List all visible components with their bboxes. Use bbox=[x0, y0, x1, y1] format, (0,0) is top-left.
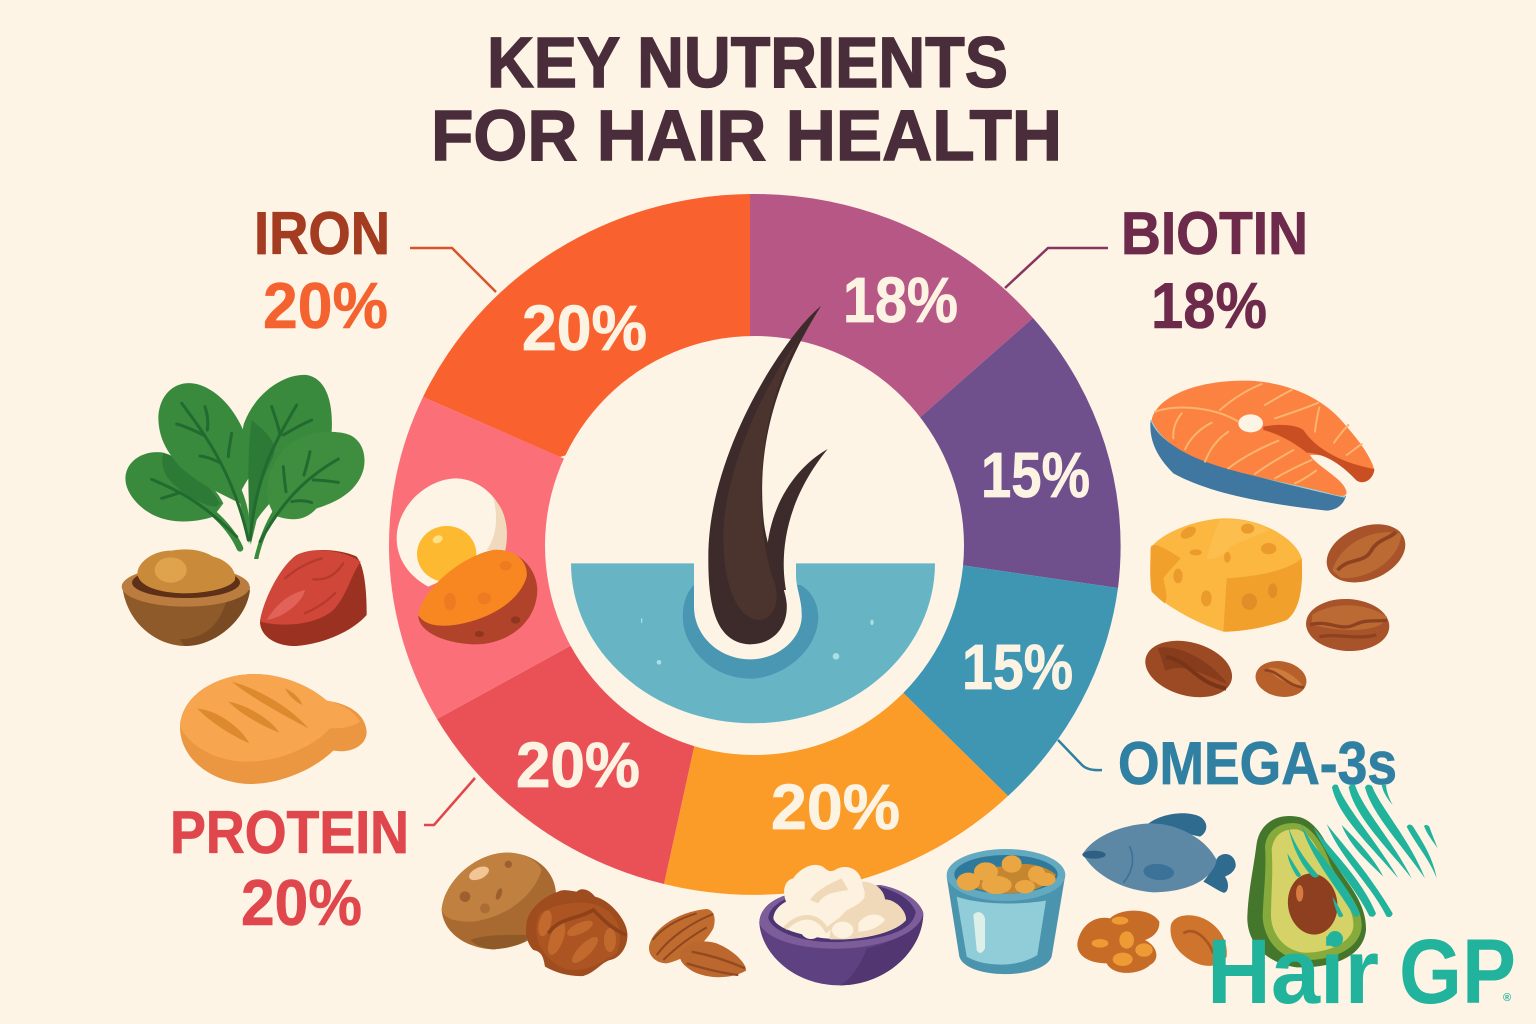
icon: cheese bbox=[1150, 518, 1302, 632]
title: FOR HAIR HEALTH bbox=[431, 97, 1062, 176]
icon: red meat bbox=[260, 550, 367, 646]
hair strand main bbox=[708, 306, 821, 644]
slice percentages: 15% bbox=[981, 439, 1090, 511]
icon group: bottom-left foods bbox=[442, 853, 746, 977]
logo: Hair GP: GP bbox=[1399, 921, 1516, 1023]
donut chart bbox=[389, 194, 1121, 895]
icon group: iron foods left bbox=[122, 375, 537, 784]
hair strand side bbox=[767, 449, 828, 590]
logo: Hair GP: Hair bbox=[1207, 921, 1379, 1023]
slice percentages: 20% bbox=[771, 771, 900, 843]
slice percentages: 20% bbox=[516, 729, 640, 801]
icon: yogurt bowl bbox=[759, 865, 923, 985]
label: iron bbox=[254, 200, 496, 342]
label: biotin: BIOTIN bbox=[1121, 200, 1308, 267]
icon: fish bbox=[1082, 813, 1236, 893]
label: protein bbox=[170, 778, 475, 939]
icon group: omega-3 foods bbox=[1077, 813, 1366, 973]
scalp specks bbox=[641, 618, 874, 665]
label: protein: PROTEIN bbox=[170, 799, 409, 866]
slice: purple bbox=[900, 318, 1121, 588]
icon: chicken breast bbox=[180, 674, 367, 784]
slice: iron bbox=[423, 194, 750, 457]
slice: protein red bbox=[437, 635, 700, 884]
logo brush strokes bbox=[1287, 785, 1438, 917]
label: protein: 20% bbox=[241, 866, 362, 939]
follicle ring bbox=[683, 585, 818, 679]
title: KEY NUTRIENTS bbox=[487, 24, 1008, 103]
label: omega-3s: OMEGA-3s bbox=[1118, 730, 1397, 797]
label: biotin: 18% bbox=[1151, 269, 1267, 342]
icon: almonds bbox=[649, 909, 746, 977]
icon: walnuts small bbox=[1077, 911, 1159, 973]
icon: salmon steak bbox=[1150, 381, 1374, 511]
slice percentages: 20% bbox=[522, 292, 647, 364]
icon: cup of nuts bbox=[947, 849, 1065, 974]
slice: biotin bbox=[750, 194, 1033, 435]
label: iron: IRON bbox=[254, 200, 390, 267]
icon: avocado bbox=[1247, 816, 1366, 967]
slice percentages: 15% bbox=[962, 631, 1073, 703]
hair highlight bbox=[723, 340, 798, 620]
icon: pecans bbox=[1139, 513, 1414, 706]
hair follicle illustration bbox=[571, 306, 935, 723]
label: iron: 20% bbox=[263, 269, 388, 342]
icon group: dairy and cup bbox=[759, 849, 1065, 985]
logo: Hair GP: ® bbox=[1503, 992, 1511, 1004]
slice percentages bbox=[516, 264, 1090, 843]
title bbox=[431, 24, 1062, 176]
icon: spinach bbox=[125, 375, 365, 559]
slice percentages: 18% bbox=[843, 264, 958, 336]
centre hole bbox=[545, 336, 964, 755]
icon: walnut bbox=[526, 889, 627, 976]
scalp bowl bbox=[571, 563, 935, 723]
logo: Hair GP bbox=[1207, 921, 1516, 1023]
slice: omega-3 teal bbox=[880, 562, 1118, 796]
icon: nut bowl bbox=[122, 549, 250, 646]
slice: pink bbox=[389, 397, 590, 719]
icon: pecan small bbox=[1171, 915, 1227, 966]
icon: potato bbox=[442, 853, 556, 949]
icon: egg and sweet potato bbox=[397, 478, 537, 644]
icon group: biotin foods right bbox=[1139, 381, 1414, 706]
label: biotin bbox=[1005, 200, 1308, 342]
slice: orange bbox=[664, 670, 1008, 895]
follicle opening bbox=[694, 560, 802, 659]
